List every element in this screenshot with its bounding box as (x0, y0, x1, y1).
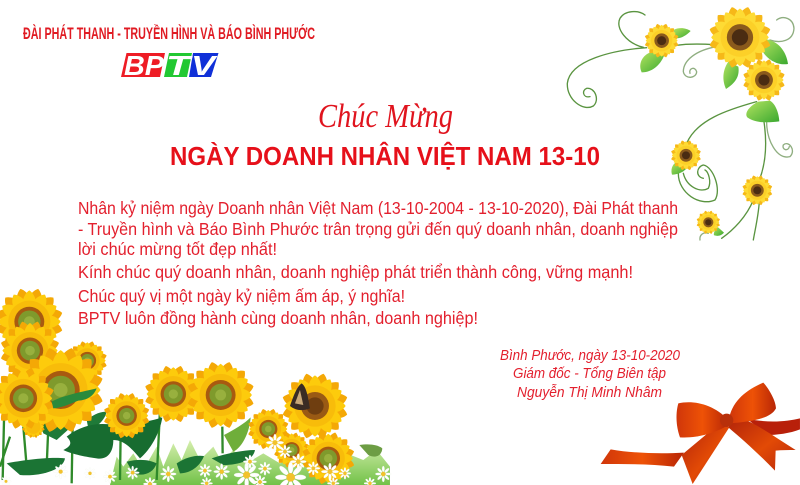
body message: Kính chúc quý doanh nhân, doanh nghiệp phát triển thành công, vững mạnh! (78, 262, 633, 282)
BPTV logo: V (191, 50, 218, 81)
body message: - Truyền hình và Báo Bình Phước trân trọng gửi đến quý doanh nhân, doanh nghiệp (78, 219, 678, 239)
BPTV logo (121, 50, 218, 81)
right loop (729, 383, 776, 423)
body message: lời chúc mừng tốt đẹp nhất! (78, 239, 277, 259)
butterfly (290, 383, 310, 410)
signature block: Giám đốc - Tổng Biên tập (513, 365, 666, 382)
right tail (728, 416, 796, 471)
far right tail (747, 418, 800, 435)
field sunflowers (0, 280, 361, 485)
vine sunflowers (640, 0, 790, 237)
body message: Nhân kỷ niệm ngày Doanh nhân Việt Nam (13-10-2004 - 13-10-2020), Đài Phát thanh (78, 198, 678, 218)
signature block: Nguyễn Thị Minh Nhâm (517, 384, 662, 401)
body message: BPTV luôn đồng hành cùng doanh nhân, doanh nghiệp! (78, 308, 478, 328)
BPTV logo: T (166, 50, 194, 81)
station name heading: ĐÀI PHÁT THANH - TRUYỀN HÌNH VÀ BÁO BÌNH PHƯỚC (23, 24, 315, 43)
body message (78, 198, 678, 328)
left loop (676, 402, 728, 437)
script title: Chúc Mừng (318, 98, 453, 135)
signature block (500, 347, 681, 401)
BPTV logo: BP (124, 50, 164, 81)
sunflower vine corner decoration (567, 0, 794, 240)
centre tail (682, 422, 729, 484)
signature block: Bình Phước, ngày 13-10-2020 (500, 347, 681, 364)
lower left tail (601, 449, 684, 467)
main heading: NGÀY DOANH NHÂN VIỆT NAM 13-10 (170, 141, 600, 171)
knot (720, 414, 733, 427)
daisies (1, 434, 391, 485)
grass (110, 440, 390, 485)
stems and dark leaves (0, 410, 382, 483)
body message: Chúc quý vị một ngày kỷ niệm ấm áp, ý nghĩa! (78, 286, 405, 306)
red ribbon bow (601, 383, 800, 484)
sunflower field (0, 280, 391, 485)
leaves (640, 28, 788, 236)
leaf over main sunflower (52, 388, 97, 408)
vines (567, 12, 794, 240)
